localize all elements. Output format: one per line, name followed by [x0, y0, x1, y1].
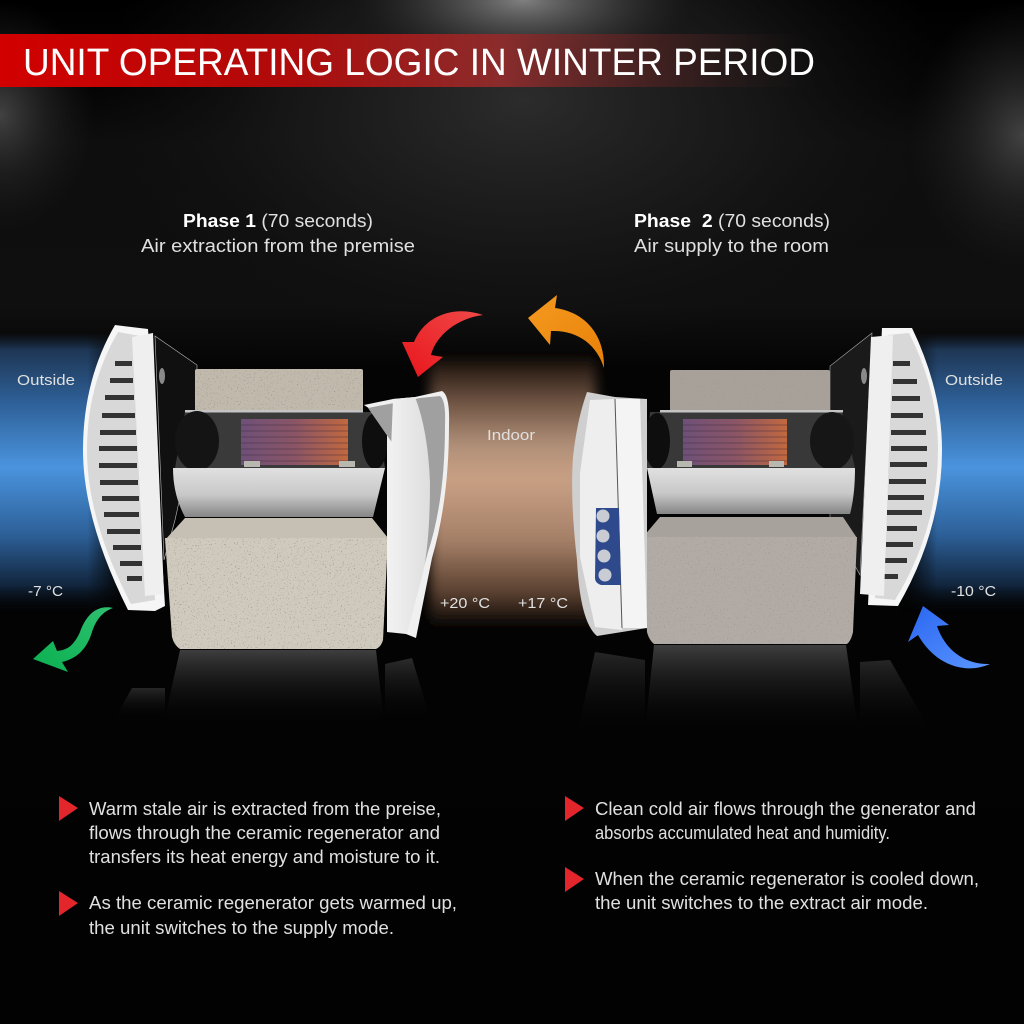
outer louvered grille [83, 325, 165, 611]
fan right [362, 413, 388, 469]
louver slots [884, 361, 927, 579]
white duct tube [647, 468, 855, 514]
right text block 2 [565, 867, 979, 913]
bullet [565, 796, 584, 821]
temperature: plus 20: +20 °C [440, 595, 490, 612]
upper concrete block [670, 370, 830, 411]
phase 2 heading: Air supply to the room [634, 235, 829, 256]
copper regenerator core [677, 419, 787, 467]
right unit [572, 328, 942, 644]
black mounting panel [155, 336, 197, 560]
phase 2 heading: Phase 2 (70 seconds) [634, 211, 830, 231]
white vertical frame [132, 333, 164, 596]
phase 1 heading: Air extraction from the premise [141, 235, 415, 256]
bullet [59, 796, 78, 821]
right text block 2: When the ceramic regenerator is cooled down, [595, 869, 979, 889]
label: outside left: Outside [17, 372, 75, 389]
left text block 2 [59, 891, 457, 938]
lower concrete block [643, 517, 857, 538]
phase 1 heading: Phase 1 (70 seconds) [183, 211, 373, 231]
temperature: minus 7: -7 °C [28, 583, 63, 600]
title banner [0, 34, 815, 87]
bullet [59, 891, 78, 916]
white vertical frame [860, 335, 893, 596]
bullet [565, 867, 584, 892]
title: UNIT OPERATING LOGIC IN WINTER PERIOD [23, 42, 815, 84]
outer louvered grille [868, 328, 942, 606]
arrow: orange out of right unit [528, 295, 604, 368]
duct interior [645, 412, 855, 468]
left text block 1: transfers its heat energy and moisture to it. [89, 847, 440, 867]
background [0, 0, 1024, 628]
temperature: minus 10: -10 °C [951, 583, 996, 600]
reflections of units [115, 645, 930, 730]
indoor panel with controls [572, 392, 647, 636]
label: outside right: Outside [945, 372, 1003, 389]
control panel [595, 508, 621, 585]
left text block 1: Warm stale air is extracted from the preise, [89, 799, 441, 819]
fan left [644, 413, 670, 469]
left text block 2: As the ceramic regenerator gets warmed up, [89, 893, 457, 913]
left text block 1 [59, 796, 441, 867]
louver slots [99, 361, 142, 581]
lower concrete block [165, 518, 388, 540]
fan right [810, 412, 854, 470]
arrow: green exhaust [33, 607, 113, 672]
right text block 1 [565, 796, 976, 843]
left unit [83, 325, 449, 649]
copper regenerator core [241, 419, 355, 467]
right text block 1: absorbs accumulated heat and humidity. [595, 823, 890, 843]
left text block 2: the unit switches to the supply mode. [89, 918, 394, 938]
duct interior [175, 412, 385, 468]
phase 2 heading [634, 211, 830, 256]
fan left [175, 411, 219, 471]
temperature: plus 17: +17 °C [518, 595, 568, 612]
indoor panel [364, 391, 449, 638]
phase 1 heading [141, 211, 415, 256]
right text block 1: Clean cold air flows through the generator and [595, 799, 976, 819]
arrow: red into left unit [402, 311, 483, 377]
label: indoor: Indoor [487, 427, 535, 444]
arrow: blue intake [908, 606, 990, 668]
left text block 1: flows through the ceramic regenerator and [89, 823, 440, 843]
black mounting panel [830, 333, 872, 575]
white duct tube [173, 468, 385, 517]
upper concrete block [195, 369, 363, 411]
right text block 2: the unit switches to the extract air mode. [595, 893, 928, 913]
